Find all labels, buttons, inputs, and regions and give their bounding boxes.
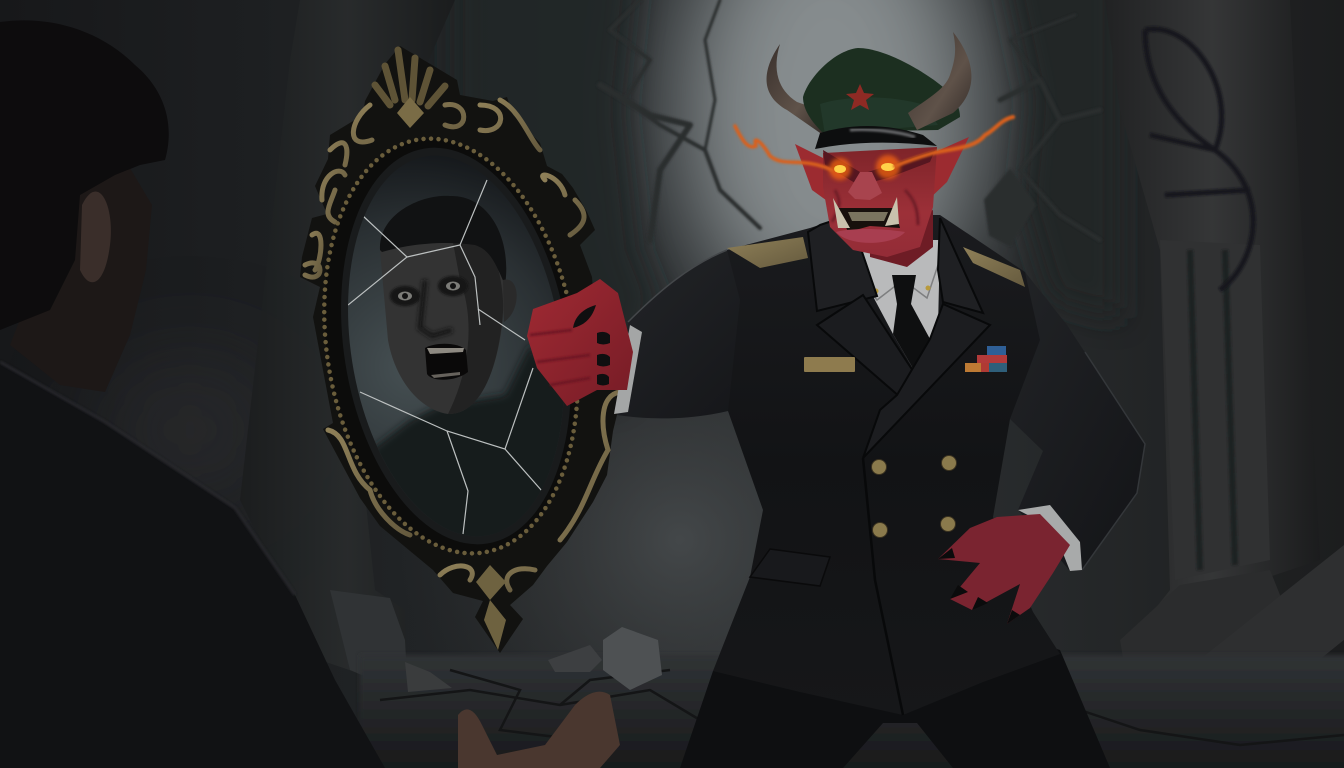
officer: jacket front seam: [863, 458, 903, 715]
officer: brass buttons: [872, 456, 956, 538]
officer: white cuff: [614, 325, 642, 414]
officer: lapels: [808, 215, 990, 458]
man: neck and face: [10, 160, 152, 392]
officer: hip arm rim light: [1082, 352, 1145, 570]
officer: left epaulette: [727, 237, 808, 268]
mirror: top diamond: [397, 97, 424, 128]
fallen slab right: [1155, 545, 1344, 768]
officer: neck: [870, 210, 933, 267]
mirror: gold ornaments: [305, 50, 620, 590]
foreground open hand: [458, 692, 620, 768]
fist: thumb claw: [573, 305, 596, 328]
dark wall around the breach: [450, 0, 1120, 420]
officer: cap: [803, 48, 960, 149]
officer's fist gripping the mirror: [527, 279, 633, 406]
man: hair: [0, 20, 169, 330]
officer: right hand on hip: [938, 514, 1070, 624]
officer: arm rim light: [628, 250, 727, 322]
officer: lower lip: [836, 229, 905, 243]
officer: shirt: [843, 240, 940, 372]
left stone column: [240, 0, 455, 695]
demon officer: [614, 32, 1145, 768]
mirror: bottom diamond and handle: [476, 565, 506, 650]
officer: name plate: [804, 357, 855, 372]
officer: right horn: [908, 32, 971, 130]
officer: teeth: [848, 212, 888, 221]
officer: collar lines: [850, 262, 938, 300]
officer: right epaulette: [963, 247, 1025, 287]
officer: legs: [680, 600, 1110, 768]
mirror: reflected terrified man: [375, 196, 564, 536]
officer: glowing eyes: [829, 155, 900, 180]
officer: mouth: [838, 208, 900, 232]
mirror: glass cracks: [348, 180, 542, 534]
rubble stones: [405, 627, 662, 692]
officer: medal ribbons: [965, 346, 1007, 372]
officer: face: [823, 147, 937, 257]
mirror: glass: [322, 140, 590, 552]
mirror: inner dark ring: [314, 131, 598, 561]
foreground man seen from behind: [0, 20, 385, 768]
mirror: bead ring: [296, 120, 606, 572]
officer: pocket flap: [750, 549, 830, 586]
man: body: [0, 362, 385, 768]
officer: collar pins: [874, 286, 930, 294]
man: shoulder highlight: [0, 362, 295, 595]
officer: extended arm: [617, 250, 790, 418]
officer: nose: [848, 172, 882, 200]
officer: hip arm: [985, 262, 1145, 571]
mirror: outer frame: [300, 46, 623, 653]
officer: necktie: [892, 275, 930, 372]
officer: jacket: [713, 215, 1060, 715]
officer: ears: [795, 144, 830, 203]
wall cracks: [600, 0, 1100, 245]
officer: hip cuff: [1018, 505, 1082, 571]
right stone column: [1105, 0, 1320, 690]
hand: claws: [938, 548, 1020, 624]
officer: flames from eyes: [735, 117, 1013, 170]
ornate mirror: [296, 46, 623, 653]
fist: finger claws: [597, 332, 610, 386]
officer: cheek folds: [832, 190, 918, 225]
officer: brow shadow: [823, 150, 935, 183]
officer: tusks: [833, 197, 899, 228]
cap: red star: [846, 84, 874, 110]
man: ear: [80, 192, 111, 282]
cracked stone floor: [360, 655, 1344, 768]
officer: left horn: [767, 44, 829, 135]
